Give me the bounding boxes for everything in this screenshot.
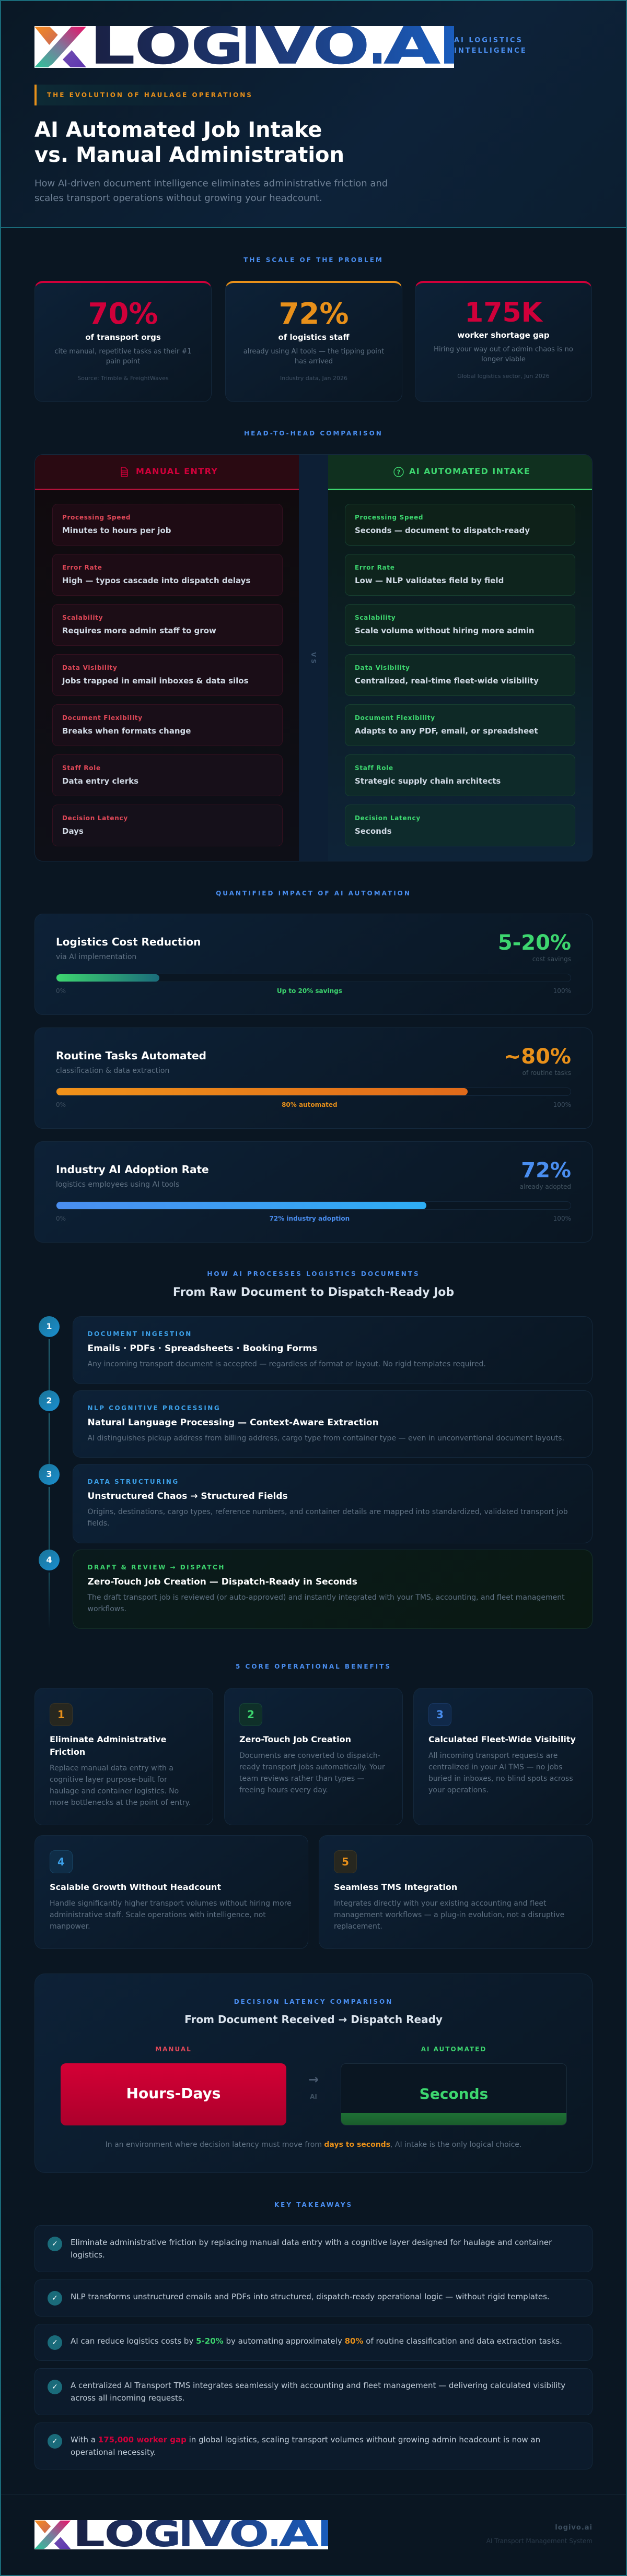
takeaway 5: operational necessity. — [71, 2448, 156, 2457]
step 4 card: workflows. — [88, 1605, 126, 1613]
benefit 1: 1 — [57, 1708, 65, 1721]
manual label: MANUAL — [155, 2046, 192, 2053]
progress bar: 20% — [56, 974, 571, 982]
bar card: adoption rate: logistics employees using AI tools — [56, 1180, 179, 1189]
bar card: cost reduction: via AI implementation — [56, 953, 136, 961]
row: document flexibility: Breaks when formats change — [62, 726, 191, 736]
bar card: routine tasks: 0% — [56, 1101, 66, 1108]
row: data visibility: Jobs trapped in email inboxes & data silos — [62, 676, 249, 686]
benefit 5: Seamless TMS Integration — [334, 1882, 457, 1892]
progress bar: 72% — [56, 1201, 571, 1210]
benefit 3: All incoming transport requests are — [428, 1752, 558, 1760]
takeaway 2 — [34, 2279, 593, 2317]
step 3 card — [72, 1464, 593, 1543]
takeaway 1 — [34, 2225, 593, 2272]
step 4 card — [72, 1550, 593, 1629]
bar card: cost reduction: Up to 20% savings — [277, 987, 342, 995]
step 2 card: AI distinguishes pickup address from billing address, cargo type from container type — even in unconventional document layouts. — [88, 1434, 564, 1443]
step 1 card: DOCUMENT INGESTION — [88, 1330, 192, 1338]
benefit 5: Integrates directly with your existing accounting and fleet — [334, 1899, 547, 1908]
header band — [1, 1, 626, 228]
step 1 card — [72, 1316, 593, 1384]
row: processing speed — [52, 504, 283, 545]
step 3 card: fields. — [88, 1519, 109, 1528]
connector: 3 to 4 — [49, 1487, 50, 1550]
step 1 number — [39, 1316, 60, 1337]
row: data visibility: Centralized, real-time fleet-wide visibility — [355, 676, 539, 686]
takeaway 4 — [34, 2368, 593, 2415]
stat card: 70%: Source: Trimble & FreightWaves — [77, 375, 169, 382]
row: decision latency: Seconds — [355, 826, 392, 836]
footer tagline: AI Transport Management System — [486, 2537, 593, 2545]
row: decision latency: Decision Latency — [62, 814, 128, 822]
step 1 card: Any incoming transport document is accepted — regardless of format or layout. No rigid templates required. — [88, 1360, 486, 1368]
step 2 number — [39, 1390, 60, 1411]
takeaway 1: ✓ — [52, 2240, 58, 2248]
stat card: 72%: 72% — [278, 297, 349, 331]
step 1 card: Emails · PDFs · Spreadsheets · Booking Forms — [88, 1343, 317, 1354]
takeaway 4: A centralized AI Transport TMS integrates seamlessly with accounting and fleet management — delivering calculated visibility — [71, 2381, 565, 2390]
stat card: 72% — [225, 281, 402, 402]
row: processing speed: Minutes to hours per job — [62, 526, 171, 535]
step 2 card — [72, 1390, 593, 1458]
row: data visibility: Data Visibility — [62, 664, 118, 671]
benefit 2: 2 — [247, 1708, 254, 1721]
row: data visibility — [52, 654, 283, 695]
latency eyebrow: DECISION LATENCY COMPARISON — [234, 1998, 393, 2005]
row: scalability: Requires more admin staff to grow — [62, 626, 216, 635]
stat card: 175K — [415, 281, 592, 402]
subtitle: scales transport operations without growing your headcount. — [34, 193, 322, 204]
step 3 card: Unstructured Chaos → Structured Fields — [88, 1491, 288, 1502]
row: scalability — [345, 604, 575, 645]
column header: ai — [328, 455, 592, 490]
row: document flexibility: Document Flexibility — [355, 714, 435, 722]
progress bar: 80% — [56, 1088, 571, 1096]
stat card: 175K: worker shortage gap — [457, 330, 550, 340]
column header: ai: AI AUTOMATED INTAKE — [409, 466, 530, 476]
row: processing speed: Processing Speed — [62, 514, 131, 521]
bar card: routine tasks: Routine Tasks Automated — [56, 1049, 206, 1062]
benefit 2: Documents are converted to dispatch- — [239, 1752, 380, 1760]
benefit 3: buried in inboxes, no blind spots across — [428, 1775, 573, 1783]
row: decision latency — [345, 805, 575, 846]
step 1 number: 1 — [46, 1321, 52, 1331]
stat card: 70%: of transport orgs — [85, 333, 161, 342]
row: staff role: Staff Role — [62, 764, 101, 772]
manual latency block — [61, 2063, 286, 2125]
row: scalability: Scale volume without hiring more admin — [355, 626, 535, 635]
heading: benefits: 5 CORE OPERATIONAL BENEFITS — [236, 1663, 391, 1670]
row: processing speed: Seconds — document to dispatch-ready — [355, 526, 530, 535]
benefit 4: Scalable Growth Without Headcount — [50, 1882, 221, 1892]
bar card: adoption rate: already adopted — [520, 1183, 571, 1190]
latency title: From Document Received → Dispatch Ready — [184, 2013, 443, 2026]
row: error rate: Error Rate — [355, 564, 395, 571]
benefit 4 — [34, 1835, 308, 1949]
stat card: 175K: 175K — [465, 297, 542, 328]
step 3 number — [39, 1464, 60, 1485]
stat card: 70%: cite manual, repetitive tasks as their #1 — [54, 348, 192, 356]
takeaway 4: across all incoming requests. — [71, 2393, 184, 2403]
takeaway 3 — [34, 2324, 593, 2361]
row: processing speed — [345, 504, 575, 545]
takeaway 2: NLP transforms unstructured emails and PDFs into structured, dispatch-ready operational logic — without rigid templates. — [71, 2292, 550, 2301]
row: document flexibility: Document Flexibility — [62, 714, 143, 722]
column: manual entry — [35, 455, 299, 861]
row: decision latency — [52, 805, 283, 846]
step 3 number: 3 — [46, 1469, 52, 1479]
latency caption: In an environment where decision latency must move from days to seconds, AI intake is the only logical choice. — [106, 2141, 521, 2149]
ai label: AI AUTOMATED — [421, 2046, 486, 2053]
title: AI Automated Job Intake — [34, 118, 322, 142]
heading: scale of the problem: THE SCALE OF THE PROBLEM — [243, 256, 384, 264]
step 4 card: Zero-Touch Job Creation — Dispatch-Ready in Seconds — [88, 1577, 357, 1587]
footer logo — [34, 2520, 328, 2549]
row: staff role: Staff Role — [355, 764, 393, 772]
column header: manual: MANUAL ENTRY — [136, 466, 218, 476]
eyebrow — [34, 85, 243, 105]
step 2 number: 2 — [46, 1396, 52, 1405]
benefit 2: freeing hours every day. — [239, 1786, 328, 1794]
benefit 5: 5 — [342, 1856, 349, 1868]
row: staff role: Data entry clerks — [62, 776, 138, 786]
icon: help circle — [393, 467, 404, 477]
bar card: adoption rate — [34, 1141, 593, 1243]
benefit 2: team reviews rather than types — — [239, 1775, 365, 1783]
benefit 4: 4 — [57, 1856, 65, 1868]
logo tagline: INTELLIGENCE — [454, 47, 527, 55]
bar card: routine tasks: 100% — [553, 1101, 571, 1108]
row: decision latency: Decision Latency — [355, 814, 421, 822]
benefit 5: replacement. — [334, 1922, 382, 1931]
bar card: adoption rate: Industry AI Adoption Rate — [56, 1163, 209, 1176]
takeaway 5: With a 175,000 worker gap in global logistics, scaling transport volumes without growing admin headcount is now an — [71, 2435, 540, 2444]
stat card: 72%: of logistics staff — [278, 333, 350, 342]
stat card: 175K: Global logistics sector, Jun 2026 — [457, 373, 550, 380]
takeaway 5: ✓ — [52, 2437, 58, 2445]
benefit 1: cognitive layer purpose-built for — [50, 1776, 167, 1784]
logo tagline: AI LOGISTICS — [454, 37, 523, 44]
step 4 card: The draft transport job is reviewed (or auto-approved) and instantly integrated with your TMS, accounting, and fleet management — [88, 1593, 565, 1602]
benefit 5: management workflows — a plug-in evolution, not a disruptive — [334, 1911, 564, 1919]
bar card: cost reduction: Logistics Cost Reduction — [56, 936, 201, 948]
bar card: adoption rate: 0% — [56, 1215, 66, 1222]
row: staff role — [52, 754, 283, 796]
bar card: cost reduction: 0% — [56, 987, 66, 995]
footer brand: logivo.ai — [555, 2524, 593, 2532]
stat card: 72%: Industry data, Jan 2026 — [280, 375, 347, 382]
row: data visibility: Data Visibility — [355, 664, 410, 671]
benefit 4: Handle significantly higher transport volumes without hiring more — [50, 1899, 292, 1908]
row: scalability: Scalability — [62, 614, 103, 621]
icon: help circle: ? — [397, 469, 401, 476]
row: error rate — [52, 554, 283, 595]
row: data visibility — [345, 654, 575, 695]
bar card: cost reduction: 100% — [553, 987, 571, 995]
eyebrow: THE EVOLUTION OF HAULAGE OPERATIONS — [47, 91, 253, 99]
icon: clipboard — [121, 467, 128, 477]
bar card: cost reduction — [34, 914, 593, 1015]
manual latency block: Hours-Days — [126, 2085, 220, 2102]
connector: 1 to 2 — [49, 1339, 50, 1390]
stat card: 175K: Hiring your way out of admin chaos is no — [434, 346, 573, 353]
takeaway 1: logistics. — [71, 2250, 105, 2260]
bar card: cost reduction: 5-20% — [498, 931, 571, 955]
bar card: adoption rate: 72% industry adoption — [270, 1215, 350, 1222]
benefit 1: Friction — [50, 1747, 85, 1757]
step 3 card: DATA STRUCTURING — [88, 1478, 179, 1485]
row: processing speed: Processing Speed — [355, 514, 423, 521]
column: ai automated intake — [328, 455, 592, 861]
step 2 card: NLP COGNITIVE PROCESSING — [88, 1404, 220, 1412]
benefit 2 — [224, 1688, 403, 1825]
heading: key takeaways: KEY TAKEAWAYS — [274, 2201, 353, 2208]
arrow label: AI — [310, 2093, 317, 2100]
row: document flexibility — [345, 704, 575, 746]
benefit 1: Replace manual data entry with a — [50, 1764, 173, 1773]
row: scalability: Scalability — [355, 614, 396, 621]
benefit 3: centralized in your AI TMS — no jobs — [428, 1763, 562, 1771]
latency panel — [34, 1974, 593, 2173]
title — [34, 118, 344, 167]
footer — [1, 2495, 626, 2575]
heading: head to head: HEAD-TO-HEAD COMPARISON — [244, 430, 383, 437]
row: decision latency: Days — [62, 826, 84, 836]
comparison panel — [34, 454, 593, 861]
benefit 1: haulage and container logistics. No — [50, 1787, 179, 1795]
column header: manual — [35, 455, 299, 490]
row: error rate — [345, 554, 575, 595]
step 4 number: 4 — [46, 1555, 52, 1565]
row: error rate: Error Rate — [62, 564, 102, 571]
takeaway 3: AI can reduce logistics costs by 5-20% by automating approximately 80% of routine classification and data extraction tasks. — [71, 2336, 562, 2346]
row: error rate: Low — NLP validates field by field — [355, 576, 504, 585]
benefit 1 — [34, 1688, 213, 1825]
benefit 5 — [319, 1835, 593, 1949]
stat card: 70% — [34, 281, 212, 402]
bar card: routine tasks: ~80% — [504, 1045, 571, 1069]
title: vs. Manual Administration — [34, 143, 344, 167]
row: document flexibility — [52, 704, 283, 746]
takeaway 2: ✓ — [52, 2294, 58, 2302]
takeaway 3: ✓ — [52, 2338, 58, 2347]
bar card: routine tasks — [34, 1027, 593, 1129]
logo tagline — [454, 37, 527, 55]
benefit 2: ready transport jobs automatically. Your — [239, 1763, 385, 1771]
takeaway 1: Eliminate administrative friction by replacing manual data entry with a cognitive layer designed for haulage and container — [71, 2238, 552, 2247]
ai latency block: Seconds — [420, 2085, 488, 2102]
step 4 number — [39, 1550, 60, 1570]
step 2 card: Natural Language Processing — Context-Aware Extraction — [88, 1417, 379, 1428]
stat card: 70%: 70% — [88, 297, 158, 331]
benefit 1: more bottlenecks at the point of entry. — [50, 1799, 191, 1807]
subtitle: How AI-driven document intelligence eliminates administrative friction and — [34, 178, 388, 189]
stat card: 70%: pain point — [106, 358, 140, 365]
bar card: adoption rate: 100% — [553, 1215, 571, 1222]
arrow: → — [308, 2072, 319, 2087]
benefit 3: your operations. — [428, 1786, 489, 1794]
benefit 2: Zero-Touch Job Creation — [239, 1734, 351, 1744]
benefit 1: Eliminate Administrative — [50, 1734, 166, 1744]
takeaway 4: ✓ — [52, 2383, 58, 2391]
stat card: 72%: has arrived — [295, 358, 333, 365]
bar card: cost reduction: cost savings — [532, 955, 571, 963]
bar card: routine tasks: 80% automated — [282, 1101, 338, 1108]
process title: From Raw Document to Dispatch-Ready Job — [173, 1286, 454, 1299]
row: staff role: Strategic supply chain architects — [355, 776, 501, 786]
benefit 3: 3 — [436, 1708, 444, 1721]
step 3 card: Origins, destinations, cargo types, reference numbers, and container details are mapped into standardized, validated transport job — [88, 1508, 568, 1516]
heading: how ai processes: HOW AI PROCESSES LOGISTICS DOCUMENTS — [207, 1270, 420, 1278]
takeaway 5 — [34, 2423, 593, 2469]
benefit 4: manpower. — [50, 1922, 90, 1931]
benefit 3: Calculated Fleet-Wide Visibility — [428, 1734, 576, 1744]
vs label: VS — [310, 652, 317, 666]
connector: 2 to 3 — [49, 1413, 50, 1464]
stat card: 175K: longer viable — [481, 356, 526, 363]
heading: quantified impact: QUANTIFIED IMPACT OF AI AUTOMATION — [216, 890, 411, 897]
benefit 4: administrative staff. Scale operations with intelligence, not — [50, 1911, 266, 1919]
row: scalability — [52, 604, 283, 645]
row: error rate: High — typos cascade into dispatch delays — [62, 576, 250, 585]
connector: 4 tail — [49, 1573, 50, 1629]
row: staff role — [345, 754, 575, 796]
benefit 3 — [413, 1688, 593, 1825]
stat card: 72%: already using AI tools — the tipping point — [243, 348, 384, 356]
subtitle — [34, 178, 388, 204]
bar card: routine tasks: classification & data extraction — [56, 1067, 169, 1075]
bar card: adoption rate: 72% — [521, 1159, 571, 1183]
ai latency block — [341, 2063, 567, 2125]
row: document flexibility: Adapts to any PDF, email, or spreadsheet — [355, 726, 538, 736]
logo — [34, 26, 454, 68]
bar card: routine tasks: of routine tasks — [522, 1069, 571, 1077]
step 4 card: DRAFT & REVIEW → DISPATCH — [88, 1564, 225, 1571]
